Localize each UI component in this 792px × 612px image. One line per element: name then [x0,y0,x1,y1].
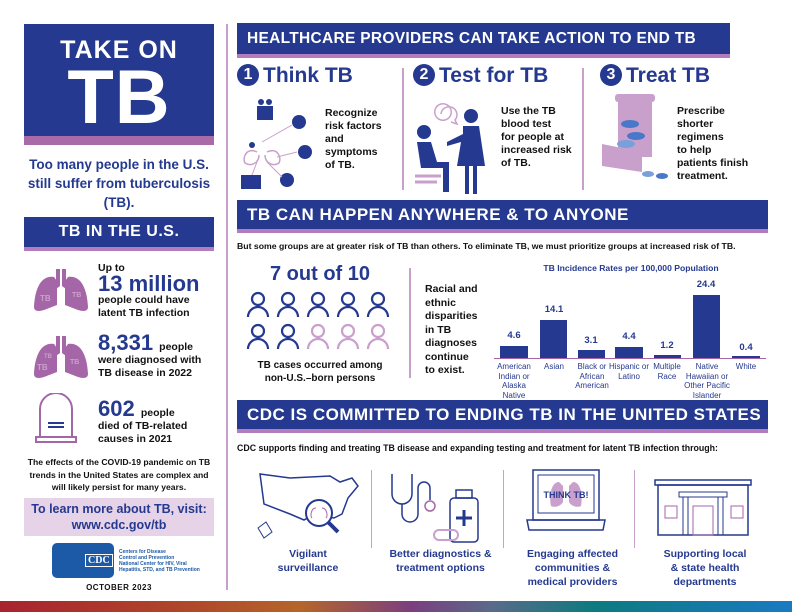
icon: headstone [35,393,77,443]
step 1: Think TB [263,64,353,87]
icon: lungs dense: TB [44,354,53,360]
step 1: symptoms [325,146,378,158]
item: engaging: medical providers [528,576,617,588]
icon: laptop Think TB [526,469,606,531]
header: CDC committed: CDC IS COMMITTED TO ENDING TB IN THE UNITED STATES [247,404,761,424]
step 2 [413,64,572,194]
step 3: 3 [607,66,615,83]
icon: risk factors [241,99,312,189]
step 3: regimens [677,131,724,143]
CDC logo: Centers for Disease [119,549,166,555]
step 3: treatment. [677,170,728,182]
stat: 602: 602 people [98,396,175,421]
bar chart: 14.1 [545,304,563,315]
disparities text: to exist. [425,364,465,376]
step 1 [237,64,382,189]
bar chart: Black or African American [575,362,609,390]
icon: lungs dense: TB [70,359,79,366]
CDC logo: Control and Prevention [119,555,174,561]
disparities text: continue [425,350,469,362]
disparities text: in TB [425,324,451,336]
icon: lungs: TB [72,292,81,299]
bar chart: 1.2 [660,340,674,351]
header: TB in the U.S. [24,217,214,251]
item: engaging: communities & [535,562,610,574]
icon: people grid [246,292,390,349]
7 out of 10 panel: 7 out of 10 [270,263,370,285]
bar chart: 4.6 [507,330,521,341]
step 3: patients finish [677,157,748,169]
step 3: Prescribe [677,105,725,117]
icon: lungs: TB [40,294,51,303]
7 out of 10 panel: TB cases occurred among [257,360,383,371]
CDC logo: National Center for HIV, Viral [119,561,187,567]
tagline: Too many people in the U.S. still suffer from tuberculosis (TB). [28,157,210,210]
disparities text: disparities [425,310,478,322]
CDC logo: CDC [88,555,110,566]
icon: lungs dense [34,336,88,378]
icon: laptop Think TB: THINK TB! [544,490,588,500]
disparities text: ethnic [425,296,456,308]
disparities text: diagnoses [425,337,477,349]
disparities text: Racial and [425,283,478,295]
step 2: 2 [420,66,428,83]
step 3: shorter [677,118,713,130]
item: surveillance: surveillance [278,562,338,574]
step 1: risk factors [325,120,382,132]
header: TB can happen anywhere: TB CAN HAPPEN ANYWHERE & TO ANYONE [247,204,629,224]
icon: building [654,479,752,536]
CDC logo: Hepatitis, STD, and TB Prevention [119,567,200,573]
item: surveillance: Vigilant [289,548,327,560]
icon: pill bottle [602,94,668,179]
bar chart [494,263,766,400]
step 1: of TB. [325,159,355,171]
header: TB in the U.S.: TB IN THE U.S. [59,223,179,240]
bar chart: TB Incidence Rates per 100,000 Population [543,263,719,273]
item: diagnostics: Better diagnostics & [389,548,492,560]
bar chart: 4.4 [622,331,636,342]
step 1: 1 [244,66,252,83]
item: surveillance [257,473,359,574]
item: health departments [654,479,752,588]
step 2: Test for TB [439,64,548,87]
icon: lungs [34,269,88,311]
item: health departments: departments [673,576,736,588]
icon: stethoscope and bottle [391,474,479,543]
stat: 13 million: people could have [98,294,190,306]
stat: 8,331: were diagnosed with [98,354,201,366]
header: healthcare providers: HEALTHCARE PROVIDERS CAN TAKE ACTION TO END TB [247,30,696,46]
icon: doctor and patient [415,103,485,194]
title panel: TB [67,55,171,140]
bar chart: 3.1 [584,335,598,346]
7 out of 10 panel [246,263,390,384]
step 2: blood test [501,118,551,130]
stat: 13 million: Up to [98,262,125,274]
step 3 [600,64,748,182]
header: CDC committed [237,400,768,433]
subtitle risk: But some groups are at greater risk of TB than others. To eliminate TB, we must prioritize groups at increased risk of TB. [237,241,736,251]
bar chart: Asian [544,362,564,371]
stat: 8,331: 8,331 people [98,330,193,355]
step 2: Use the TB [501,105,556,117]
stat: 13 million [34,262,199,319]
step 3: Treat TB [626,64,710,87]
header: healthcare providers [237,23,730,58]
bar chart: American Indian or Alaska Native [497,362,531,400]
bar chart: 0.4 [739,342,753,353]
step 1: Recognize [325,107,378,119]
icon: lungs dense: TB [37,363,48,372]
item: diagnostics: treatment options [396,562,485,574]
stat: 13 million: latent TB infection [98,307,190,319]
item: engaging [526,469,618,588]
learn more box: To learn more about TB, visit: [31,502,207,516]
item: engaging: Engaging affected [527,548,618,560]
stat: 602: died of TB-related [98,420,187,432]
subtitle CDC supports: CDC supports finding and treating TB disease and expanding testing and treatment for latent TB infection through: [237,443,718,453]
stat: 8,331: TB disease in 2022 [98,367,192,379]
learn more box [24,498,214,536]
covid note: The effects of the COVID-19 pandemic on TB trends in the United States are complex and will likely persist for many years. [28,457,210,492]
title panel [24,24,214,145]
CDC logo [52,543,200,578]
bottom gradient bar [0,601,792,612]
stat: 13 million: 13 million [98,271,199,296]
bar chart: White [736,362,756,371]
learn more box: www.cdc.gov/tb [72,518,166,532]
step 2: increased risk [501,144,572,156]
item: diagnostics [389,474,492,574]
title panel: TAKE ON [60,36,178,64]
bar chart: 24.4 [697,279,715,290]
step 2: for people at [501,131,564,143]
step 1: and [325,133,344,145]
disparities text [425,283,478,376]
stat: 8,331 [34,330,201,379]
bar chart: Native Hawaiian or Other Pacific Islander [684,362,730,400]
step 2: of TB. [501,157,531,169]
text: non-U.S.–born persons [265,373,375,384]
date: OCTOBER 2023 [86,583,152,592]
bar chart: Hispanic or Latino [609,362,649,380]
stat: 602 [35,393,187,445]
step 3: to help [677,144,711,156]
header: TB can happen anywhere [237,200,768,233]
item: health departments: Supporting local [664,548,746,560]
bar chart: Multiple Race [653,362,681,380]
item: health departments: & state health [671,562,739,574]
stat: 602: causes in 2021 [98,433,172,445]
icon: US map with magnifier [257,473,359,539]
